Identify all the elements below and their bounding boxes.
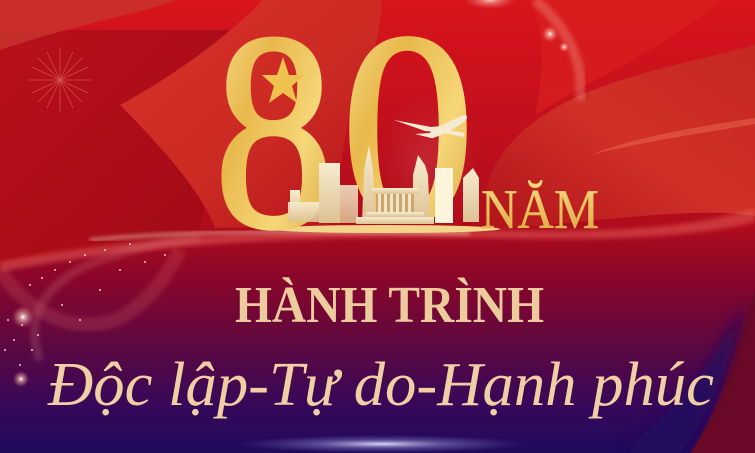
skyline <box>288 145 479 224</box>
mausoleum <box>372 188 418 194</box>
flag ribbon: right highlight <box>590 118 755 155</box>
firework <box>28 48 92 112</box>
label: NĂM: NĂM <box>481 179 599 241</box>
number 80 <box>214 0 475 287</box>
flag ribbon: right swath <box>484 45 755 230</box>
flag ribbon: center bulge behind zero <box>380 94 478 225</box>
stage glow under the skyline <box>270 225 500 233</box>
stage light bottom <box>237 435 527 453</box>
tall block left <box>319 163 340 223</box>
heading: HÀNH TRÌNH: HÀNH TRÌNH <box>235 276 544 334</box>
flag ribbon: top right fold <box>530 0 720 115</box>
spire tower <box>362 145 376 222</box>
icon: star <box>262 57 304 103</box>
panel: upper left dark red area <box>0 30 240 265</box>
panel: bottom right navy glow <box>620 300 745 453</box>
slogan: Độc lập-Tự do-Hạnh phúc <box>47 351 714 419</box>
sparkle arc top right <box>464 0 581 100</box>
panel: bottom right maroon corner <box>690 290 755 453</box>
far right tower <box>463 168 479 222</box>
flag ribbon: top left <box>0 0 175 50</box>
sparkle ribbon left <box>0 238 200 387</box>
light streak <box>90 232 470 240</box>
small tower far left <box>290 190 300 214</box>
white block right <box>435 168 453 223</box>
financial tower <box>413 155 430 222</box>
icon: airplane <box>394 115 467 138</box>
light band under the title <box>0 208 755 272</box>
flag ribbon: central swath <box>120 0 382 228</box>
